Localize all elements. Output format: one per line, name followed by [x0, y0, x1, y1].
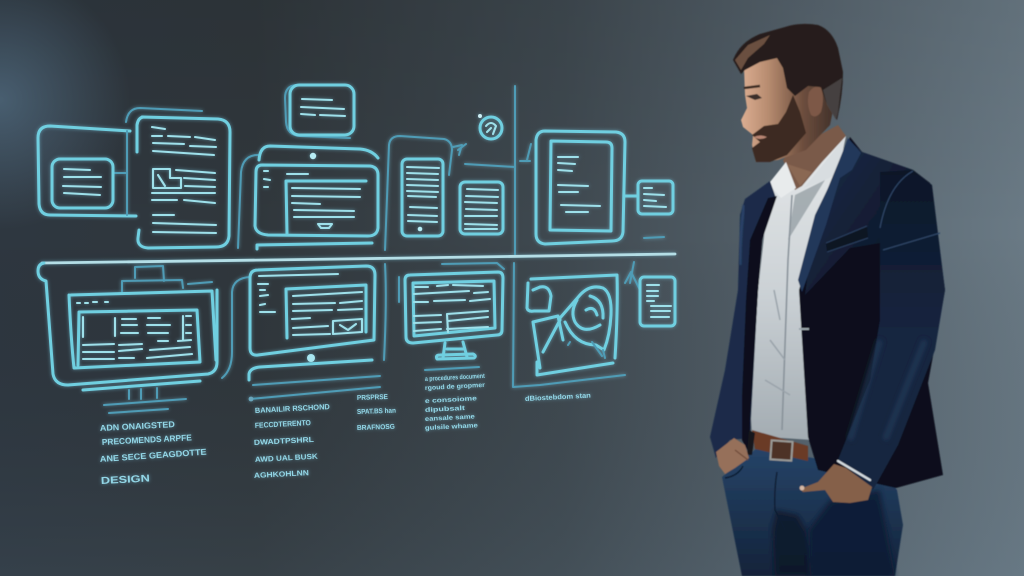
icon: round gear glyph [478, 114, 502, 139]
head: hair [733, 24, 843, 120]
text block: monitor caption [425, 373, 486, 432]
text block: right caption list: PRSPRSE [357, 394, 388, 402]
text block: right caption list [357, 394, 396, 432]
panel: left connected card [38, 126, 136, 216]
text block: middle caption: AWD UAL BUSK [255, 452, 319, 464]
text block: left caption: ANE SECE GEAGDOTTE [99, 447, 207, 464]
divider: long horizontal rule [42, 254, 675, 263]
head: ear [808, 87, 823, 116]
panel: large monitor [38, 263, 217, 413]
text block: left caption: ADN ONAIGSTED [100, 419, 175, 433]
text block: monitor caption: gulsile whame [425, 422, 478, 432]
panel: framed tablet with side note [465, 86, 673, 255]
person: standing man in blazer [710, 24, 945, 576]
panel: top laptop [238, 146, 378, 249]
text block: middle caption: AGHKOHLNN [254, 468, 309, 480]
jeans [722, 448, 903, 576]
text block: monitor caption: a procedures document [425, 373, 486, 383]
panel: third desktop monitor [384, 263, 504, 370]
text block: middle caption: DWADTPSHRL [254, 435, 314, 447]
blazer right sleeve [838, 170, 945, 490]
text block: middle caption: BANAILIR RSCHOND [255, 402, 331, 415]
text block: left caption [99, 419, 207, 487]
text block: right caption list: BRAFNOSG [357, 424, 396, 432]
text block: right caption list: SPAT.BS han [357, 408, 396, 416]
shirt collar [769, 136, 846, 198]
panel: second monitor [222, 266, 380, 401]
text block: middle caption [254, 402, 331, 480]
text block: monitor caption: e consoiome [425, 395, 478, 405]
hologram wireframe diagram [38, 85, 675, 487]
belt [747, 430, 808, 461]
text block: monitor caption: eansale same [425, 413, 475, 423]
text block: left caption: PRECOMENDS ARPFE [102, 432, 192, 447]
panel: sketch illustration frame [513, 263, 625, 387]
head: face [741, 54, 836, 162]
blazer left front and arm [710, 181, 777, 458]
text block: middle caption: FECCDTERENTO [255, 418, 311, 430]
panel: top small card [285, 85, 354, 138]
neck [783, 125, 846, 190]
panel: small side document [625, 262, 675, 326]
text block: monitor caption: dipubsalt [425, 405, 466, 414]
panel: tall document card [126, 108, 230, 248]
shirt [750, 137, 845, 440]
head: beard [752, 95, 806, 162]
text block: illustration caption: dBiostebdom stan [525, 393, 591, 403]
hands in pockets [716, 438, 872, 503]
text block: left caption: DESIGN [101, 473, 150, 487]
text block: monitor caption: rgoud de gropmer [425, 382, 486, 392]
panel: phone and card column [385, 136, 503, 250]
blazer body [798, 137, 945, 488]
